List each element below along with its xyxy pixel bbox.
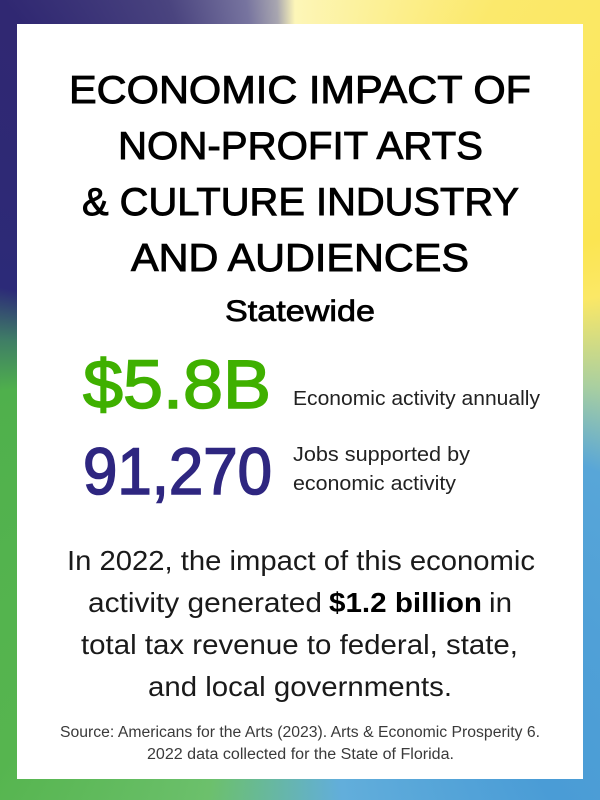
subtitle: Statewide — [225, 295, 375, 328]
stat: economic activity — [83, 346, 541, 423]
source note: 2022 data collected for the State of Florida. — [147, 746, 454, 763]
title: ECONOMIC IMPACT OF — [69, 69, 531, 112]
stat: jobs: Jobs supported by — [293, 443, 471, 466]
stat: jobs: economic activity — [293, 472, 457, 495]
source note: Source: Americans for the Arts (2023). Arts & Economic Prosperity 6. — [60, 724, 540, 741]
stat: economic activity: $5.8B — [83, 346, 271, 423]
stat: jobs: 91,270 — [83, 434, 272, 508]
tax revenue paragraph: total tax revenue to federal, state, — [81, 629, 518, 660]
title — [69, 69, 531, 280]
tax revenue paragraph — [67, 545, 535, 702]
title: AND AUDIENCES — [131, 237, 469, 280]
stat: economic activity: Economic activity annually — [293, 387, 541, 410]
title: & CULTURE INDUSTRY — [82, 181, 519, 224]
tax revenue paragraph: $1.2 billion — [329, 587, 482, 618]
tax revenue paragraph: activity generated — [88, 587, 322, 618]
tax revenue paragraph: in — [489, 587, 512, 618]
stat: jobs — [83, 434, 471, 508]
title: NON-PROFIT ARTS — [118, 125, 483, 168]
tax revenue paragraph: and local governments. — [148, 671, 452, 702]
source note — [60, 724, 540, 763]
tax revenue paragraph: In 2022, the impact of this economic — [67, 545, 535, 576]
